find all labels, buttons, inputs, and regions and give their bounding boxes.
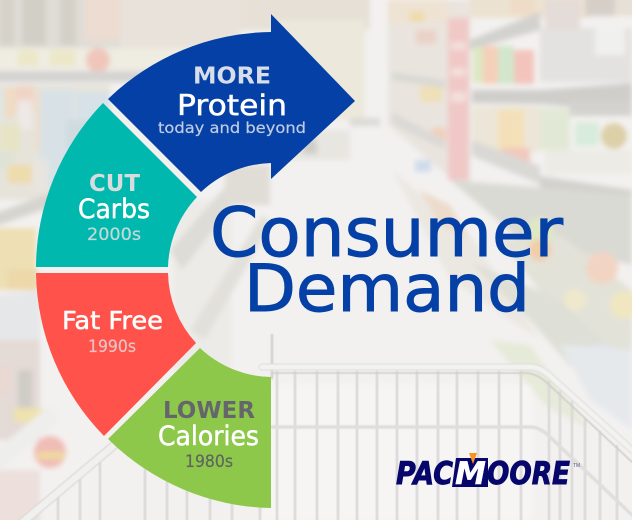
right lower shelves <box>392 170 540 340</box>
title: Consumer Demand <box>210 194 563 327</box>
logo: PacMoore: OORE <box>487 456 570 492</box>
label: Fat Free 1990s: Fat Free <box>62 306 163 335</box>
label: MORE Protein today and beyond <box>158 62 306 137</box>
logo: PacMoore <box>396 453 580 492</box>
label: LOWER Calories 1980s <box>158 396 259 472</box>
label: Fat Free 1990s: 1990s <box>88 337 136 357</box>
segment: protein arrow <box>108 14 355 192</box>
label: LOWER Calories 1980s: LOWER <box>163 396 255 424</box>
title: Consumer Demand: Demand <box>244 252 530 327</box>
label: Fat Free 1990s <box>62 306 163 357</box>
label: CUT Carbs 2000s: Carbs <box>78 194 150 225</box>
label: MORE Protein today and beyond: MORE <box>193 62 271 90</box>
logo: PacMoore: TM <box>573 463 580 469</box>
label: LOWER Calories 1980s: 1980s <box>185 452 233 472</box>
label: CUT Carbs 2000s: CUT <box>89 169 140 197</box>
label: MORE Protein today and beyond: today and beyond <box>158 119 306 137</box>
segment: lower calories <box>108 348 271 508</box>
logo: PacMoore: PAC <box>396 456 453 492</box>
circular timeline chart <box>36 14 355 508</box>
centre left <box>172 200 232 370</box>
label: LOWER Calories 1980s: Calories <box>158 421 259 452</box>
segment: cut carbs <box>36 103 197 267</box>
logo: PacMoore: M <box>455 456 486 492</box>
left shelf products <box>0 84 110 200</box>
label: CUT Carbs 2000s: 2000s <box>87 225 141 245</box>
label: CUT Carbs 2000s <box>78 169 150 245</box>
segment: fat free <box>36 273 196 436</box>
shopping cart wires <box>18 335 632 520</box>
top left <box>0 0 120 48</box>
right near shelves <box>388 0 470 195</box>
label: MORE Protein today and beyond: Protein <box>177 89 287 122</box>
title: Consumer Demand: Consumer <box>210 194 563 273</box>
